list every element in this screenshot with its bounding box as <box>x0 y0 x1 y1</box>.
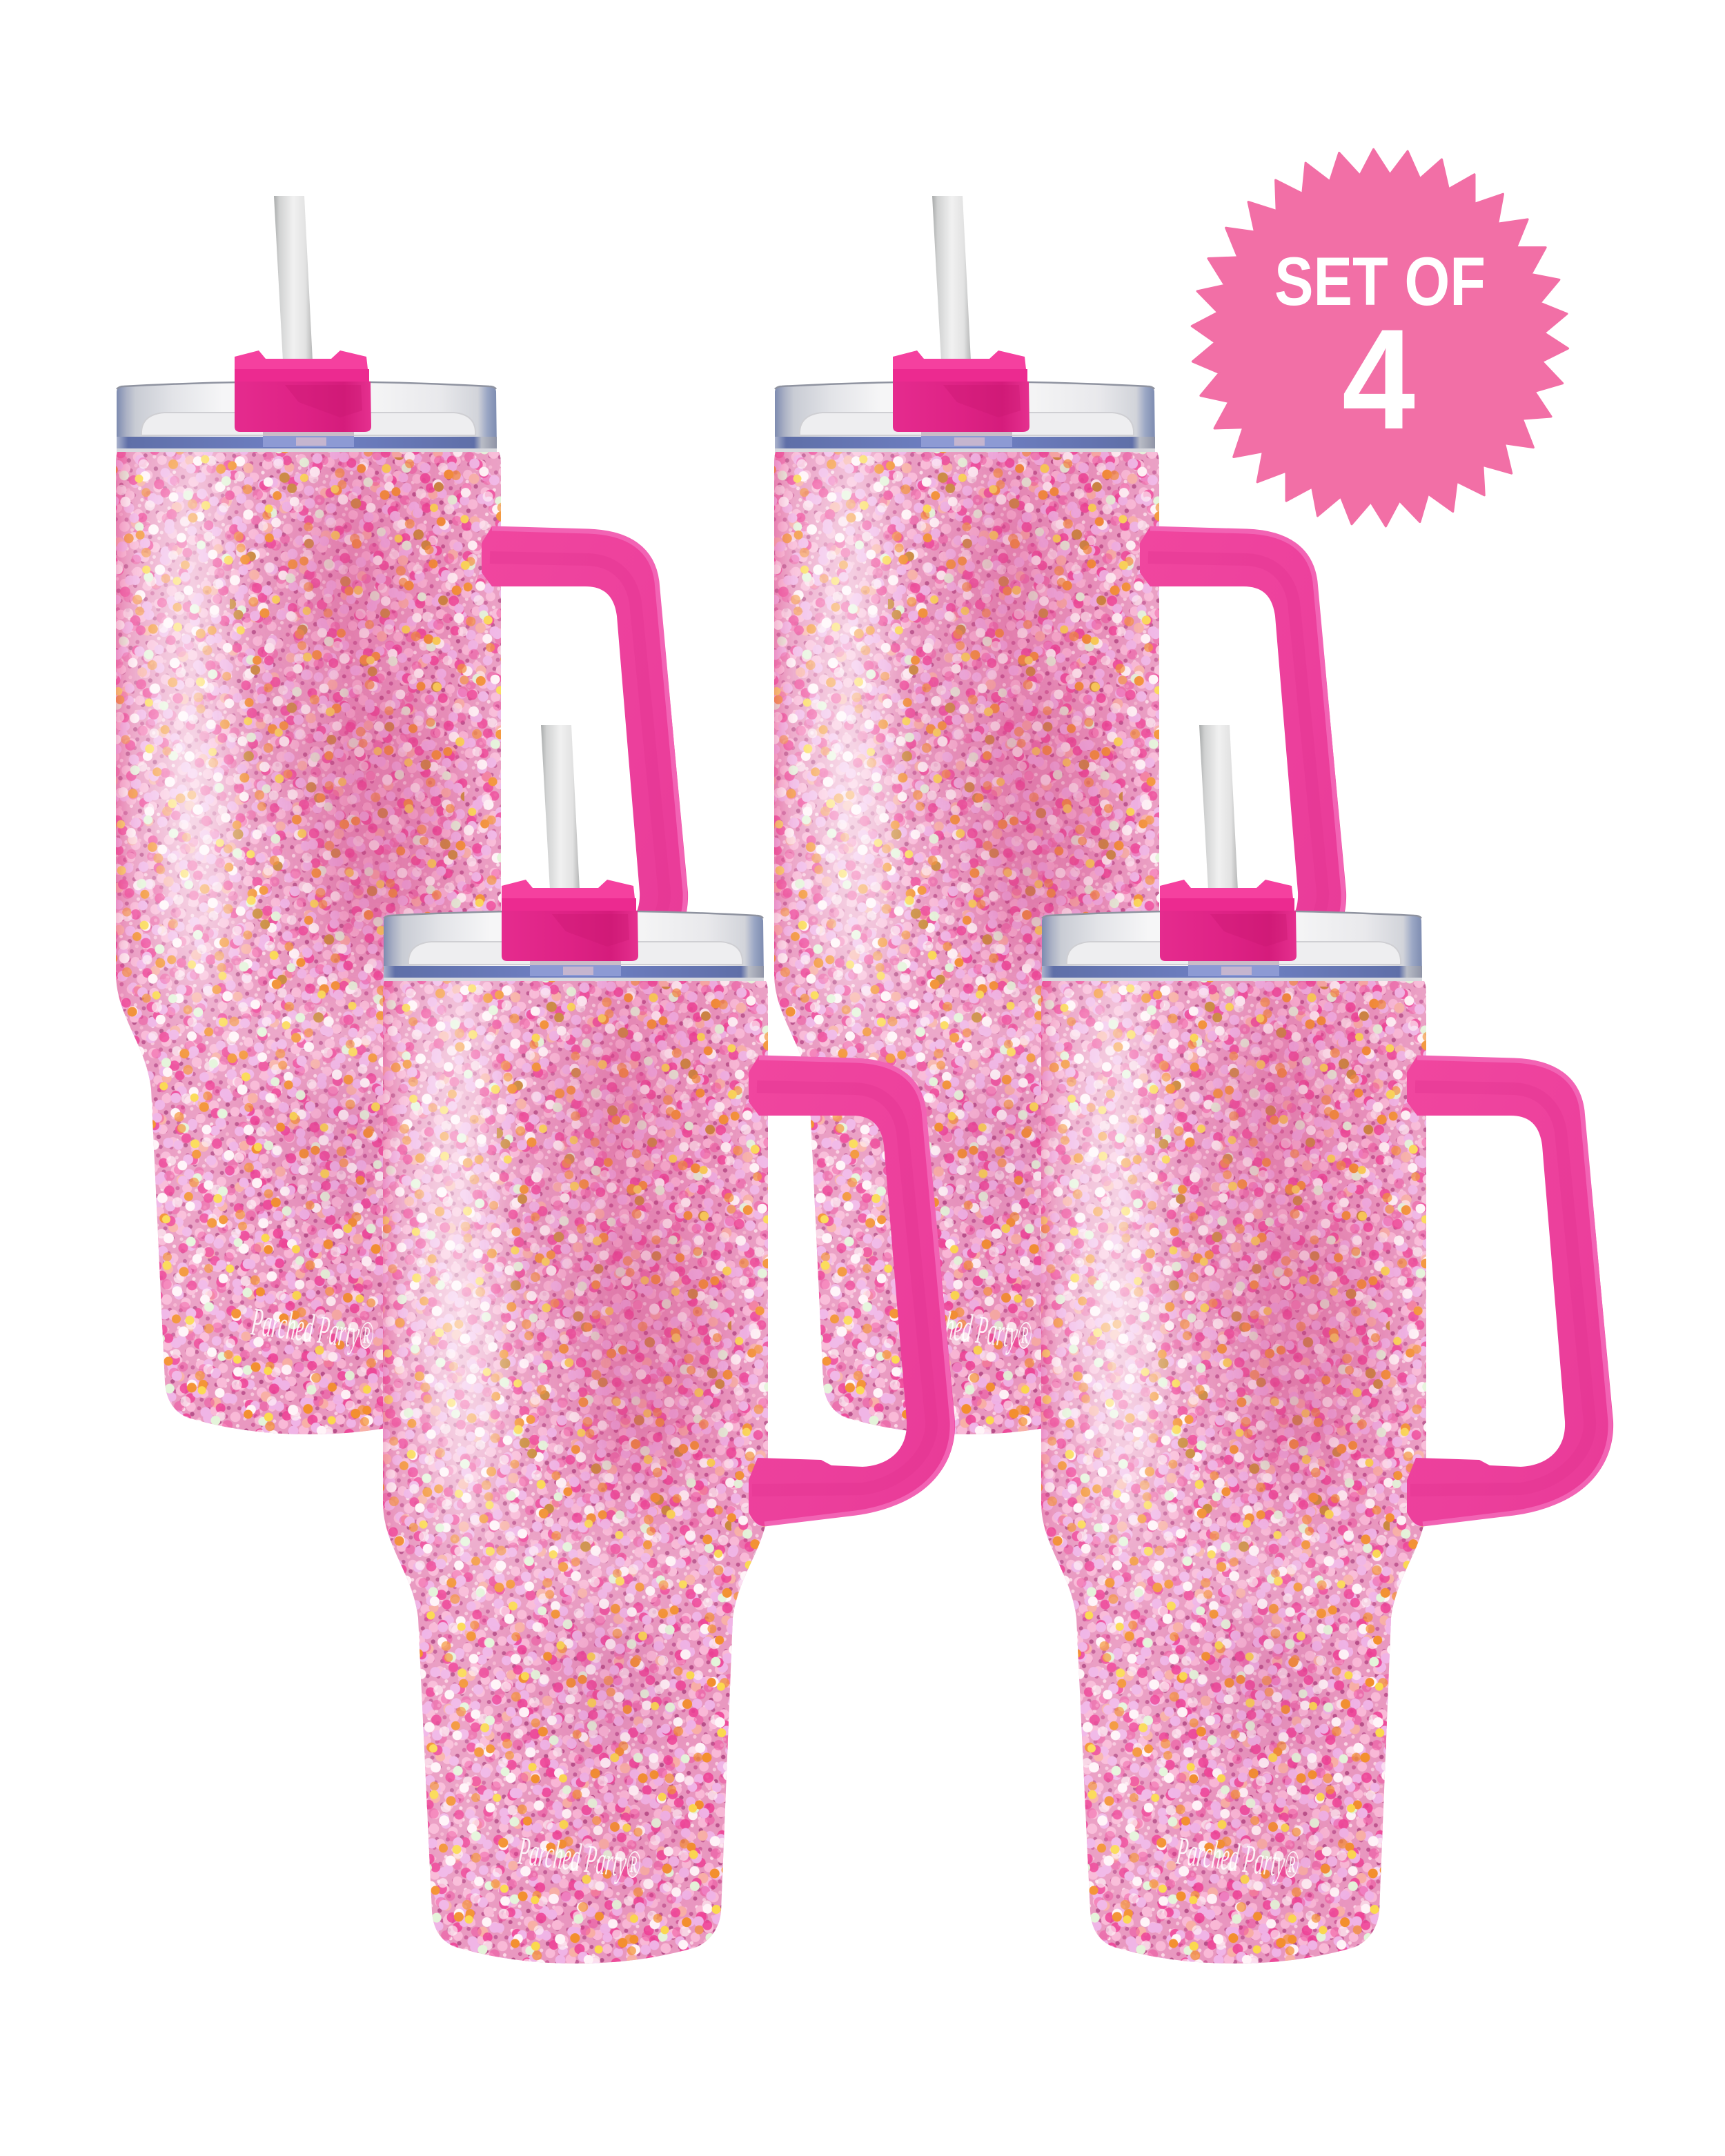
straw cap <box>1160 880 1297 961</box>
glitter body <box>1031 973 1438 1973</box>
straw <box>932 196 971 361</box>
lid <box>384 911 764 982</box>
straw <box>1199 725 1238 890</box>
straw <box>541 725 580 890</box>
tumbler: back left: Parched Party® <box>248 1298 376 1358</box>
straw cap <box>502 880 638 961</box>
straw cap <box>235 350 371 432</box>
tumbler: back right <box>764 196 1346 1444</box>
badge: set of 4 starburst <box>1192 149 1568 526</box>
tumbler: front right <box>1031 725 1613 1973</box>
tumbler: front right: Parched Party® <box>1174 1828 1301 1888</box>
straw <box>274 196 313 361</box>
tumbler: front left <box>373 725 955 1973</box>
badge text: set of: SET OF <box>1274 243 1486 319</box>
lid <box>117 382 497 453</box>
tumbler: back left <box>106 196 688 1444</box>
handle <box>1140 526 1346 997</box>
glitter body <box>106 444 513 1444</box>
lid <box>1042 911 1422 982</box>
glitter body <box>764 444 1171 1444</box>
straw cap <box>893 350 1029 432</box>
tumbler: back right: Parched Party® <box>907 1298 1034 1358</box>
glitter body <box>373 973 780 1973</box>
product image: four glitter tumblers with set-of-4 badge <box>116 148 1613 1964</box>
handle <box>482 526 688 997</box>
badge number: 4: 4 <box>1342 299 1415 459</box>
starburst shape <box>1192 149 1568 526</box>
lid <box>775 382 1155 453</box>
tumbler: front left: Parched Party® <box>515 1828 643 1888</box>
handle <box>749 1056 955 1526</box>
handle <box>1407 1056 1613 1526</box>
